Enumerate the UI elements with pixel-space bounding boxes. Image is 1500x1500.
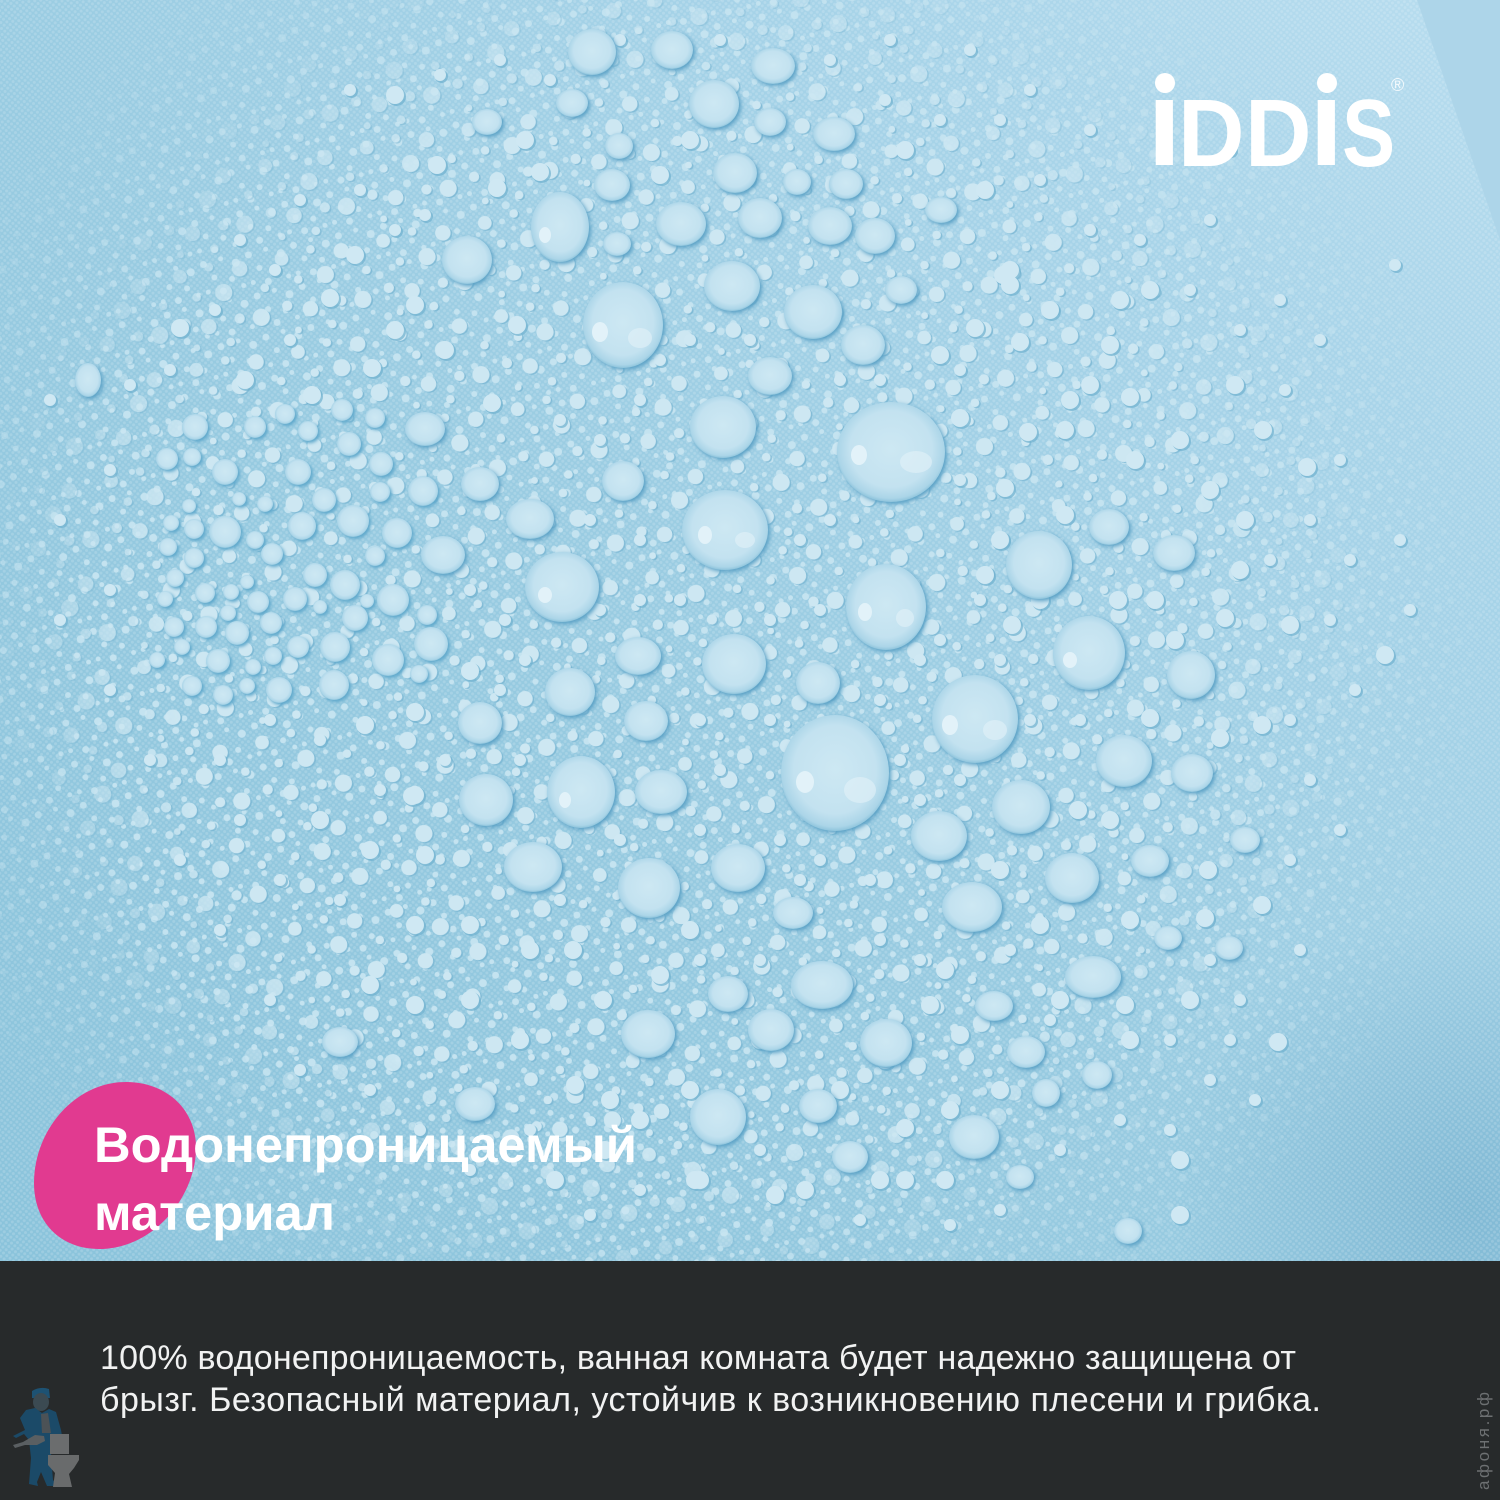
watermark: афоня.рф: афоня.рф (1474, 1392, 1493, 1490)
darker fabric fold, top right (1417, 0, 1500, 240)
heading (94, 1117, 637, 1241)
logo: IDDIS: S (1342, 79, 1395, 187)
heading: материал (94, 1185, 335, 1241)
small water droplets (50, 40, 1412, 1226)
logo: IDDIS: D (1245, 79, 1312, 186)
icon: plumber with toilet (13, 1388, 79, 1487)
description text: 100% водонепроницаемость, ванная комната будет надежно защищена от (100, 1339, 1296, 1377)
logo: IDDIS: i (1309, 53, 1344, 192)
pink blob behind heading (34, 1082, 196, 1249)
description text (100, 1339, 1321, 1419)
medium water droplets field (20, 0, 1352, 1261)
dark footer band (0, 1261, 1500, 1500)
logo: IDDIS: D (1178, 79, 1245, 186)
droplet highlights (538, 227, 1077, 808)
left cluster droplets (149, 399, 448, 705)
logo: IDDIS: ® (1391, 75, 1404, 95)
large water droplets (75, 29, 1260, 1244)
heading: Водонепроницаемый (94, 1117, 637, 1173)
description text: брызг. Безопасный материал, устойчив к возникновению плесени и грибка. (100, 1381, 1321, 1419)
logo: IDDIS (1155, 73, 1404, 167)
logo: IDDIS: i (1147, 53, 1182, 192)
